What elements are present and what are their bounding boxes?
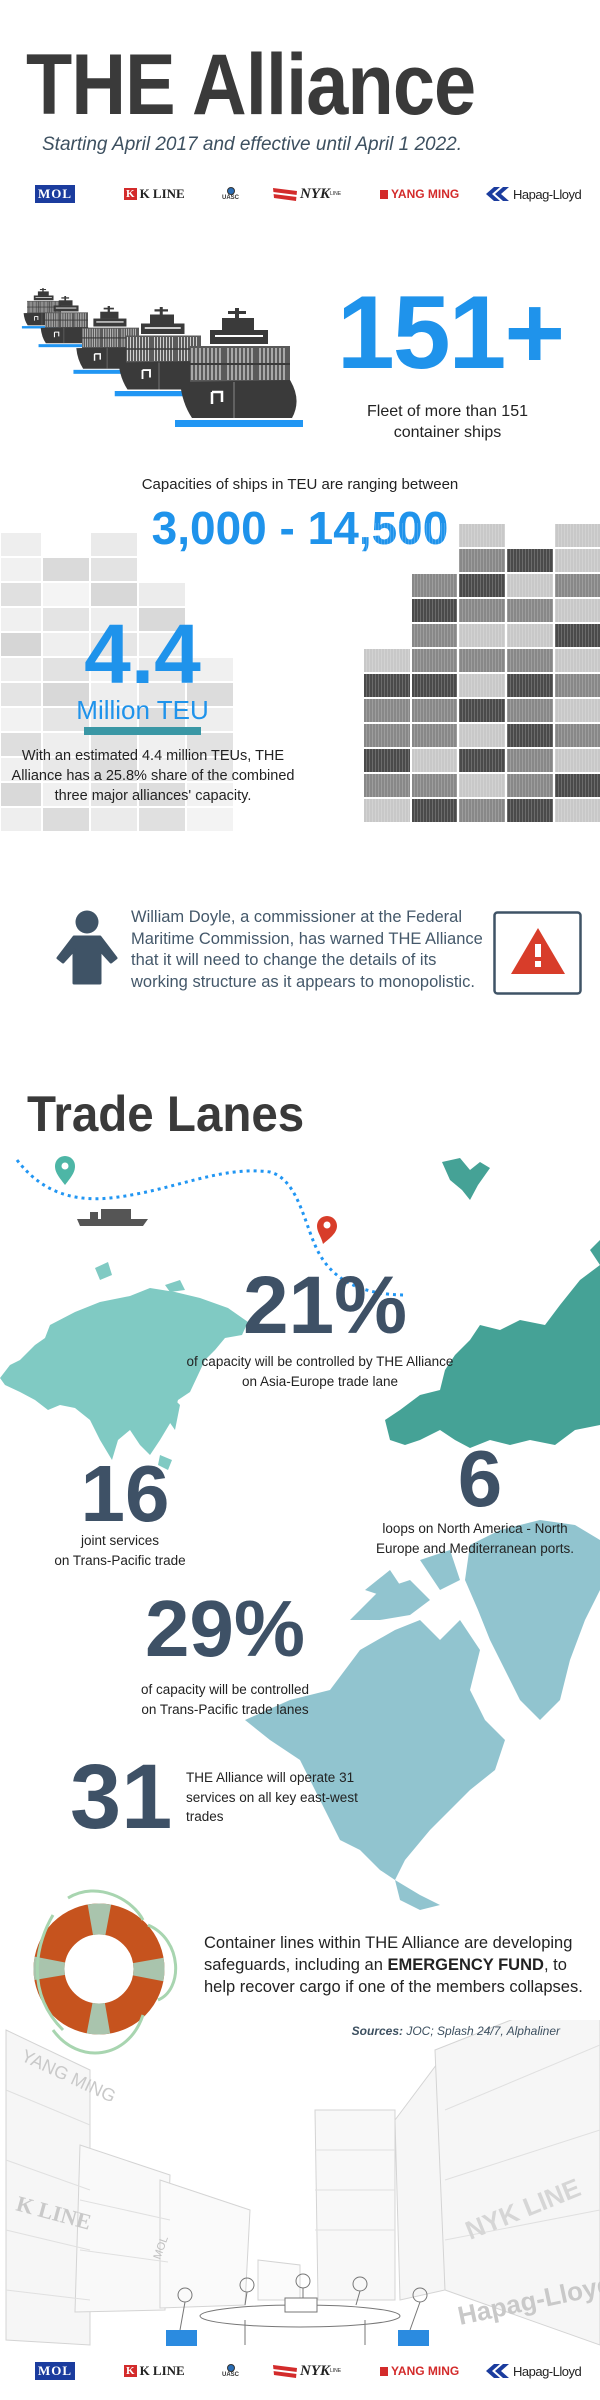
text: capacities label: Capacities of ships in TEU are ranging between (142, 476, 458, 493)
logo: NYK: NYK (300, 2362, 330, 2378)
text: fleet description (367, 403, 528, 441)
map: North America and Greenland (245, 1520, 600, 1910)
text: 31 description: THE Alliance will operate 31 services on all key east-west trades (186, 1770, 358, 1824)
stat: 21%: 21% (243, 1260, 407, 1351)
logo: Hapag-Lloyd: Hapag-Lloyd (513, 186, 581, 202)
icon: warning box (493, 911, 582, 995)
heading: Trade Lanes: Trade Lanes (27, 1086, 304, 1142)
stat: 3,000 - 14,500: 3,000 - 14,500 (152, 502, 448, 554)
stat: 4.4 Million TEU (76, 607, 209, 735)
text: 16 description (54, 1533, 186, 1568)
logo: NYK (273, 186, 341, 202)
icon: teal map pin (55, 1156, 75, 1185)
illustration: container yard sketch (6, 2020, 600, 2346)
map: world trade lanes (0, 1156, 600, 1910)
logo: UASC: UASC (222, 195, 239, 201)
logo: MOL: MOL (38, 186, 72, 201)
icon: lifebuoy (34, 1890, 178, 2054)
logo: K LINE: K (126, 188, 135, 200)
logo: YANG MING: YANG MING (391, 187, 459, 201)
stat: 29%: 29% (145, 1584, 305, 1673)
stat: 16: 16 (80, 1449, 169, 1538)
text: 6 description: loops on North America - North Europe and Mediterranean ports. (376, 1521, 574, 1556)
map: Svalbard (442, 1158, 490, 1200)
logos row bottom (35, 2362, 581, 2380)
text: faint container brands: MOL (152, 2235, 171, 2261)
icon: small ship (77, 1209, 148, 1226)
map: Asia (0, 1262, 248, 1470)
text: emergency fund: Container lines within THE Alliance are developing safeguards, including an EMERGENCY FUND, to help recover cargo if one of the members collapses. (204, 1934, 583, 1996)
logos row top (35, 185, 581, 203)
text: William Doyle warning: William Doyle, a commissioner at the Federal Maritime Commission, has warned THE Alliance that it will need to change the details of its working structure as it appears to monopolistic. (131, 908, 483, 991)
text: sources: Sources: JOC; Splash 24/7, Alphaliner (352, 2024, 560, 2038)
text: 21% description: of capacity will be controlled by THE Alliance on Asia-Europe trade lane (187, 1354, 453, 1389)
logo: NYK (273, 2362, 341, 2378)
logo: UASC (222, 187, 239, 201)
text: 29% description: on Trans-Pacific trade lanes (141, 1702, 309, 1716)
logo: NYK: NYK (300, 186, 330, 202)
text: 16 description: on Trans-Pacific trade (54, 1552, 186, 1568)
map: Europe (385, 1265, 600, 1448)
logo: UASC (222, 2364, 239, 2378)
title: THE Alliance (26, 37, 475, 133)
icon: fleet of ships (22, 288, 303, 427)
text: 29% description: of capacity will be controlled (141, 1682, 309, 1697)
stat: 4.4 Million TEU: Million TEU (76, 695, 209, 725)
text: faint container brands: K LINE (14, 2191, 94, 2235)
logo: K LINE: K (126, 2365, 135, 2377)
text: 16 description: joint services (81, 1533, 159, 1548)
text: faint container brands: YANG MING (18, 2045, 119, 2107)
stat: 6: 6 (458, 1434, 502, 1523)
stat: 4.4 Million TEU: 4.4 (84, 607, 201, 701)
logo: NYK: LINE (330, 191, 341, 197)
text: faint container brands (14, 2045, 600, 2331)
logo: NYK: LINE (330, 2368, 341, 2374)
stat: 31: 31 (70, 1746, 172, 1848)
icon: red map pin (317, 1216, 337, 1244)
subtitle: Starting April 2017 and effective until April 1 2022. (42, 134, 462, 155)
logo: K LINE: K LINE (140, 2363, 185, 2378)
stat: 151+: 151+ (337, 275, 563, 391)
logo: MOL: MOL (38, 2363, 72, 2378)
text: fleet description: Fleet of more than 151 (367, 403, 528, 420)
logo: Hapag-Lloyd: Hapag-Lloyd (513, 2364, 581, 2378)
logo: K LINE: K LINE (140, 186, 185, 201)
logo: UASC: UASC (222, 2372, 239, 2378)
chart: dark container stack (right) (363, 523, 600, 822)
arrow: dotted shipping route (17, 1160, 406, 1295)
logo: YANG MING: YANG MING (391, 2364, 459, 2378)
icon: person (56, 910, 118, 984)
text: fleet description: container ships (394, 424, 501, 441)
illustration: people at table (178, 2274, 427, 2345)
text: 29% description (141, 1682, 309, 1716)
chart: light container stack (left) (1, 533, 233, 831)
text: 4.4 million description: With an estimated 4.4 million TEUs, THE Alliance has a 25.8% share of the combined three major alliances' capacity. (12, 748, 294, 804)
text: faint container brands: NYK LINE (461, 2172, 585, 2246)
